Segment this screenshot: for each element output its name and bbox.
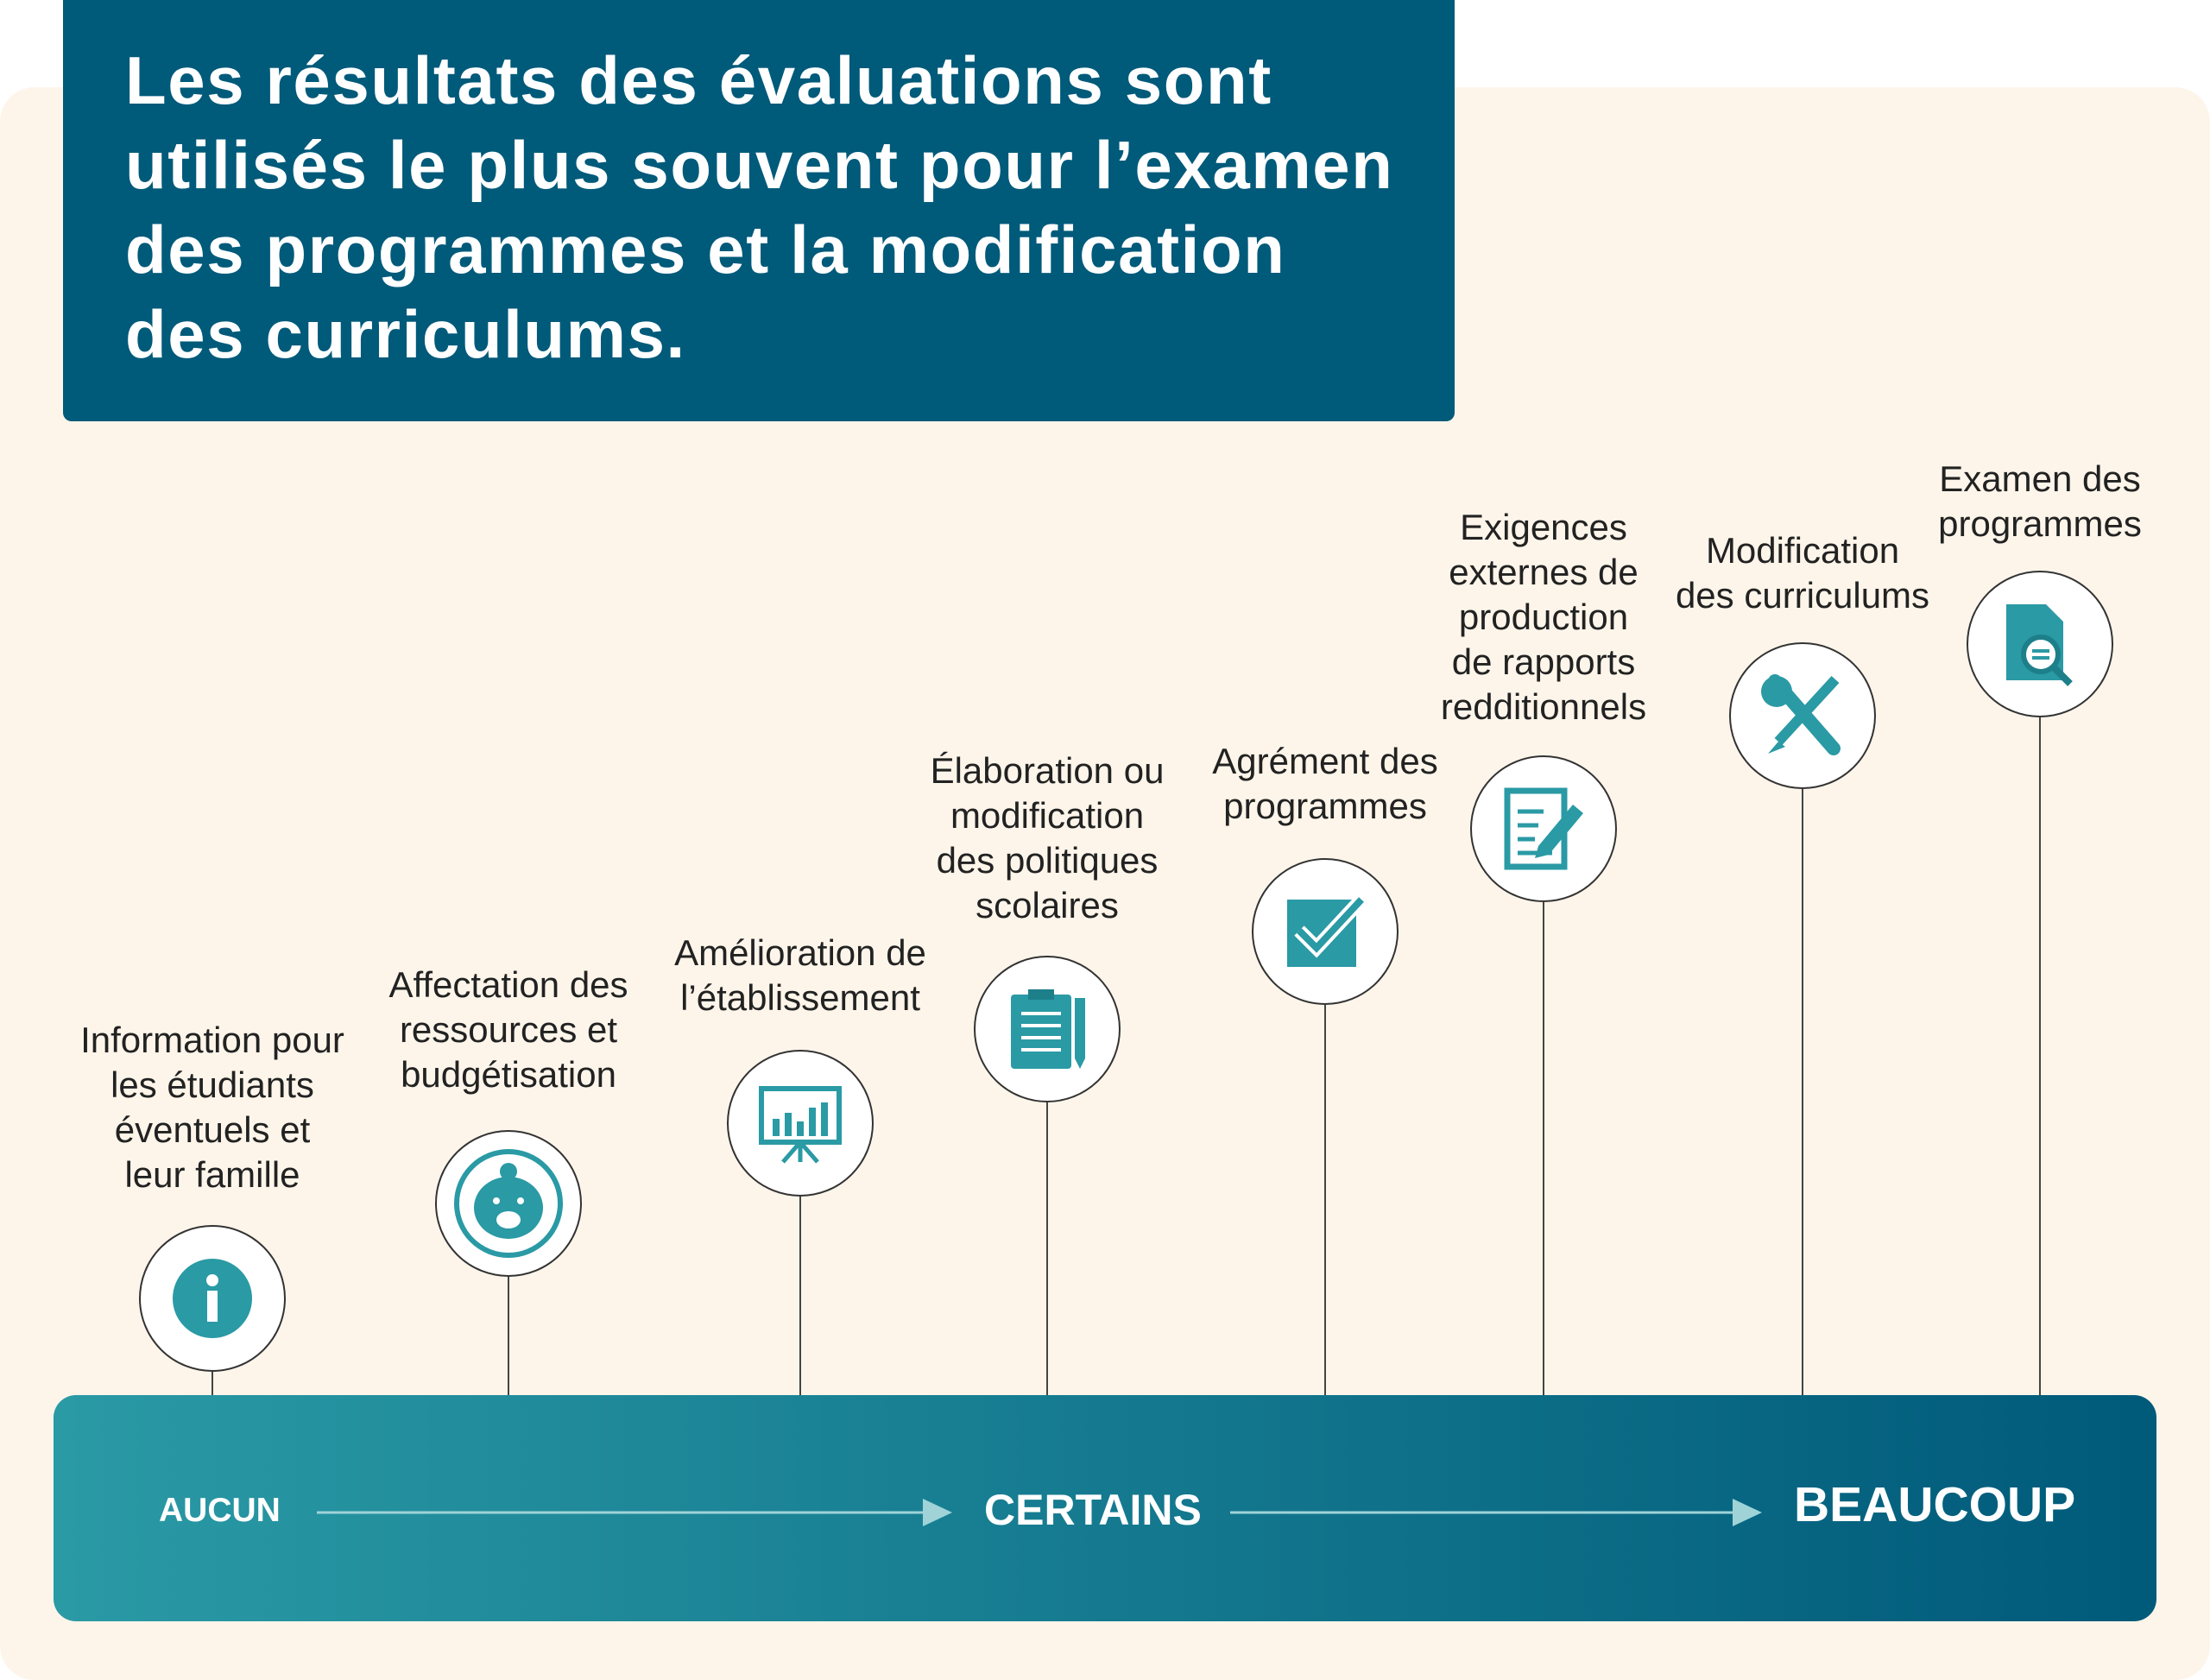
label: beaucoup: BEAUCOUP [1794,1477,2075,1532]
label 7: des curriculums [1676,575,1929,616]
icon: check box [1252,858,1399,1005]
title: utilisés le plus souvent pour l’examen [125,127,1394,203]
icon: document search [1967,571,2113,717]
label: aucun: AUCUN [159,1492,281,1529]
label 5 [1212,741,1438,826]
label 2: ressources et [400,1009,617,1050]
label 6: de rapports [1452,641,1635,682]
label: certains: CERTAINS [984,1486,1202,1534]
label 4: modification [950,795,1144,836]
label 7 [1676,530,1929,616]
label 2 [388,964,628,1095]
label 6: Exigences [1460,507,1627,547]
label 1: leur famille [124,1154,300,1195]
icon: tools [1729,642,1876,789]
label 1: les étudiants [110,1064,314,1105]
label 2: budgétisation [401,1054,616,1095]
label 6 [1441,507,1646,727]
label 3: l’établissement [680,977,920,1018]
title: des programmes et la modification [125,212,1285,287]
label 7: Modification [1706,530,1899,571]
label 8: programmes [1938,503,2142,544]
label 4: scolaires [976,885,1119,925]
icon: chart board [727,1050,874,1197]
label 8: Examen des [1939,458,2141,499]
icon: piggy bank [435,1130,582,1277]
label 4: Élaboration ou [931,750,1164,791]
icon: info [139,1225,286,1372]
label 6: externes de [1449,552,1639,592]
label 5: Agrément des [1212,741,1438,781]
label 3: Amélioration de [674,932,926,973]
label 5: programmes [1223,786,1427,826]
label 1 [80,1020,344,1195]
stems [212,717,2041,1395]
title [63,0,1455,421]
label 3 [674,932,926,1018]
arrow 1 [317,1499,952,1526]
label 1: Information pour [80,1020,344,1060]
title: des curriculums. [125,296,686,372]
label 4: des politiques [937,840,1158,881]
label 6: redditionnels [1441,686,1646,727]
arrow 2 [1230,1499,1762,1526]
label 2: Affectation des [388,964,628,1005]
icon: document pen [1470,755,1617,902]
label 8 [1938,458,2142,544]
icon: clipboard [974,956,1121,1102]
label 1: éventuels et [115,1109,310,1150]
label 4 [931,750,1164,925]
label 6: production [1459,597,1628,637]
title: Les résultats des évaluations sont [125,42,1272,118]
scale bar [54,1395,2156,1621]
